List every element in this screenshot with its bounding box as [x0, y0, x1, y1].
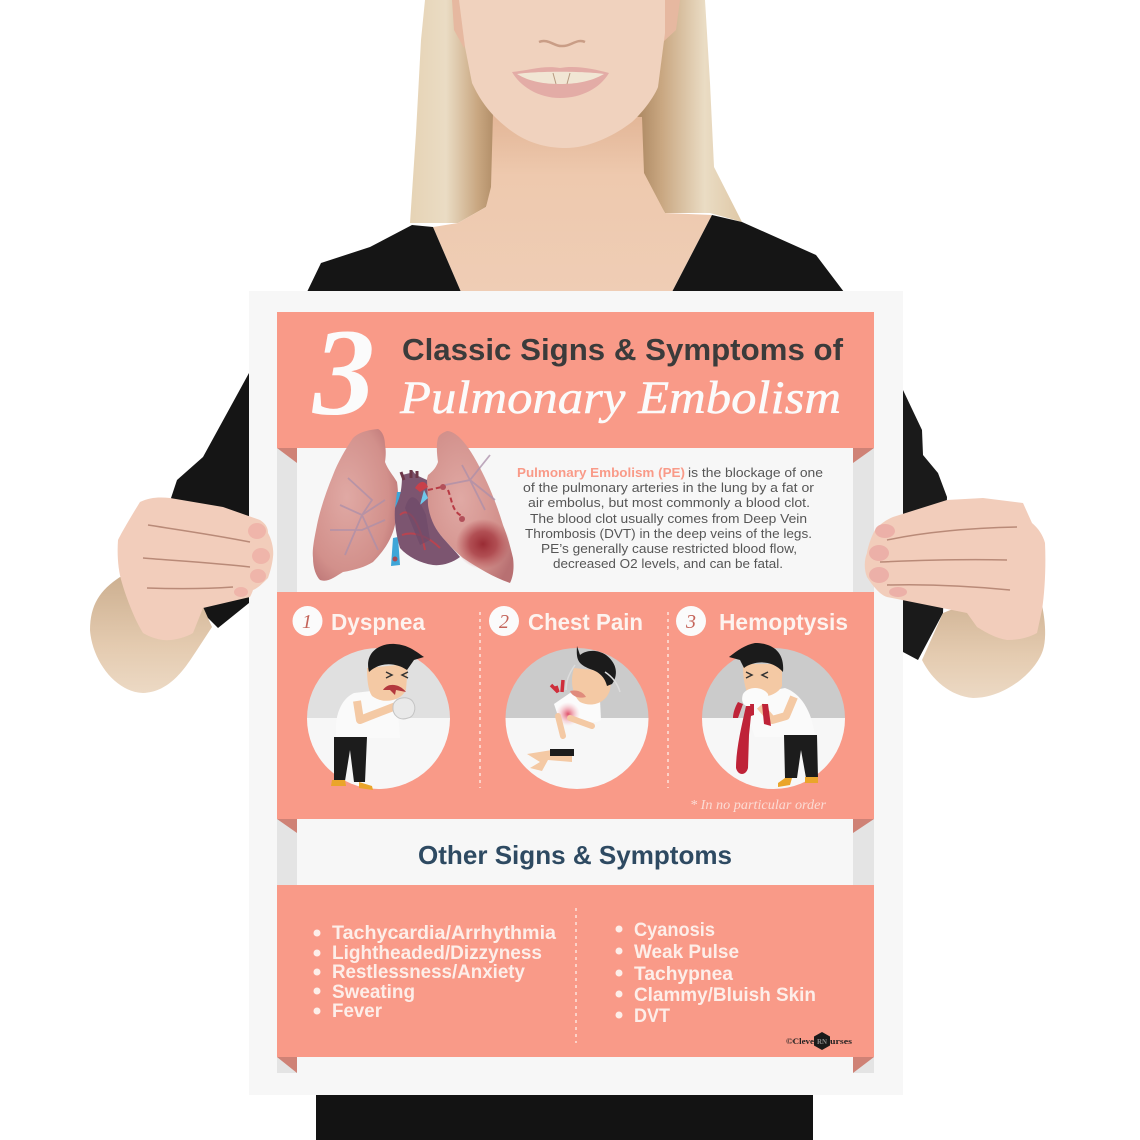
poster sheet	[249, 291, 903, 1095]
left list: Fever	[332, 1000, 382, 1022]
left list: Lightheaded/Dizzyness	[332, 942, 542, 964]
left hair	[410, 0, 500, 223]
definition text: The blood clot usually comes from Deep Vein	[530, 511, 807, 526]
right hand gripping poster	[865, 498, 1045, 640]
panel: other signs heading band	[277, 819, 874, 885]
right sleeve	[903, 390, 947, 660]
right list: Cyanosis	[634, 919, 715, 941]
logo: CleverRNurses: ©Cleve	[786, 1036, 814, 1046]
right list: Weak Pulse	[634, 941, 739, 963]
symptom 3: hemoptysis heading: Hemoptysis	[719, 609, 848, 635]
symptom 2: chest pain heading: 2	[499, 611, 509, 633]
smile	[512, 67, 609, 98]
ears	[452, 0, 680, 48]
right list: Clammy/Bluish Skin	[634, 984, 816, 1006]
symptom 3 illustration: man coughing blood	[702, 643, 845, 789]
logo: CleverRNurses: RN	[817, 1038, 827, 1046]
nose	[539, 41, 585, 46]
face	[459, 0, 665, 148]
shirt shoulders	[307, 215, 844, 292]
panel: header banner	[277, 304, 874, 448]
right list	[616, 919, 816, 1027]
symptom 1 illustration: man exhaling	[307, 644, 450, 790]
definition text	[517, 465, 823, 571]
right hair	[635, 0, 742, 222]
symptom 2: chest pain heading: Chest Pain	[528, 609, 643, 635]
heading line 2: Pulmonary Embolism	[399, 372, 841, 424]
bottom ribbon folds	[277, 1057, 874, 1073]
right upper arm	[922, 590, 1045, 698]
definition text: decreased O2 levels, and can be fatal.	[553, 556, 783, 571]
left list	[314, 922, 556, 1022]
logo: CleverRNurses: urses	[830, 1036, 853, 1046]
symptom 3: hemoptysis heading	[676, 606, 848, 636]
symptom 3: hemoptysis heading: 3	[685, 611, 696, 633]
symptom 1: dyspnea heading	[292, 606, 425, 636]
left hand gripping poster	[118, 497, 273, 640]
symptom 1: dyspnea heading: Dyspnea	[331, 609, 425, 635]
fingernails	[234, 523, 270, 597]
definition text: Pulmonary Embolism (PE)	[517, 465, 685, 480]
big numeral 3: 3	[312, 304, 375, 441]
definition text: is the blockage of one	[688, 465, 823, 480]
left list: Sweating	[332, 981, 415, 1003]
left list: Restlessness/Anxiety	[332, 961, 525, 983]
left list: Tachycardia/Arrhythmia	[332, 922, 556, 944]
definition text: of the pulmonary arteries in the lung by a fat or	[523, 480, 815, 495]
left sleeve	[171, 373, 249, 628]
shirt below poster	[316, 1090, 813, 1140]
symptom 1: dyspnea heading: 1	[302, 611, 312, 633]
panel: other symptoms lists	[277, 885, 874, 1057]
panel: other signs heading band: Other Signs & Symptoms	[418, 840, 732, 870]
panel: definition band	[277, 429, 874, 592]
heading line 1: Classic Signs & Symptoms of	[402, 332, 844, 367]
definition text: PE’s generally cause restricted blood flow,	[541, 541, 797, 556]
symptom 2 illustration: man clutching chest	[506, 646, 648, 789]
right list: DVT	[634, 1005, 670, 1027]
note: * In no particular order	[690, 797, 827, 812]
symptom 2: chest pain heading	[489, 606, 643, 636]
left upper arm	[90, 577, 212, 693]
definition text: Thrombosis (DVT) in the deep veins of the legs.	[525, 526, 812, 541]
fingernails	[869, 524, 907, 597]
right list: Tachypnea	[634, 963, 733, 985]
logo: CleverRNurses	[786, 1032, 853, 1050]
illustration: lungs and heart	[313, 429, 514, 583]
definition text: air embolus, but most commonly a blood clot.	[528, 495, 810, 510]
neck and chest	[433, 113, 712, 292]
panel: three classic symptoms	[277, 592, 874, 819]
